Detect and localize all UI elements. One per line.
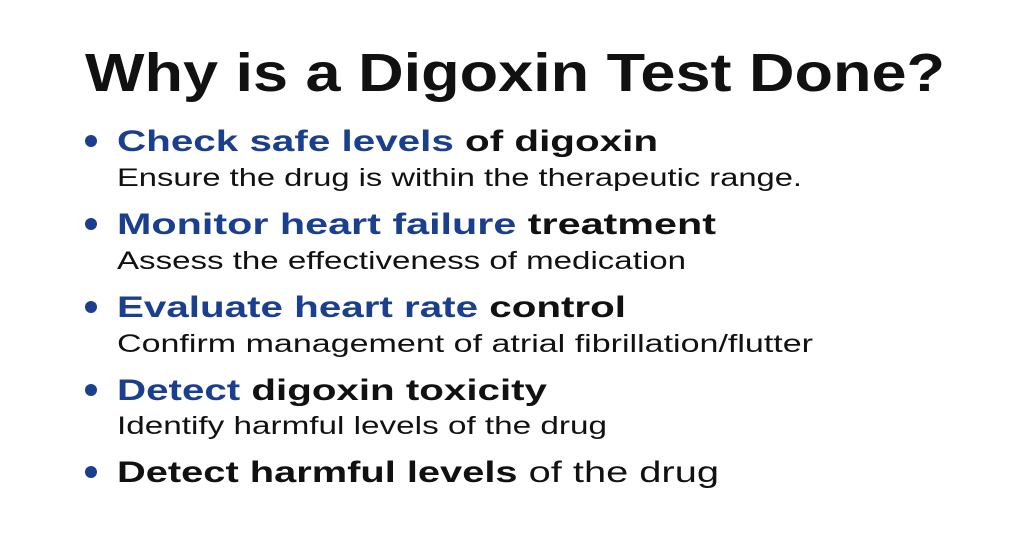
heading: Evaluate heart rate control bbox=[117, 291, 626, 324]
heading: Detect harmful levels of the drug bbox=[117, 456, 719, 489]
description: Assess the effectiveness of medication bbox=[117, 247, 686, 275]
item: detect harmful levels bbox=[85, 456, 719, 489]
heading: Detect digoxin toxicity bbox=[117, 374, 547, 407]
description: Ensure the drug is within the therapeutic range. bbox=[117, 164, 802, 192]
item: evaluate heart rate bbox=[85, 291, 813, 358]
item: check safe levels bbox=[85, 125, 802, 192]
heading: Check safe levels of digoxin bbox=[117, 125, 658, 158]
title: Why is a Digoxin Test Done? bbox=[85, 43, 945, 103]
bullet bbox=[85, 218, 97, 230]
description: Confirm management of atrial fibrillation/flutter bbox=[117, 330, 813, 358]
heading: Monitor heart failure treatment bbox=[117, 208, 716, 241]
bullet bbox=[85, 384, 97, 396]
description: Identify harmful levels of the drug bbox=[117, 412, 607, 440]
bullet bbox=[85, 466, 97, 478]
item: monitor heart failure bbox=[85, 208, 716, 275]
bullet bbox=[85, 301, 97, 313]
item: detect toxicity bbox=[85, 374, 607, 440]
bullet bbox=[85, 135, 97, 147]
